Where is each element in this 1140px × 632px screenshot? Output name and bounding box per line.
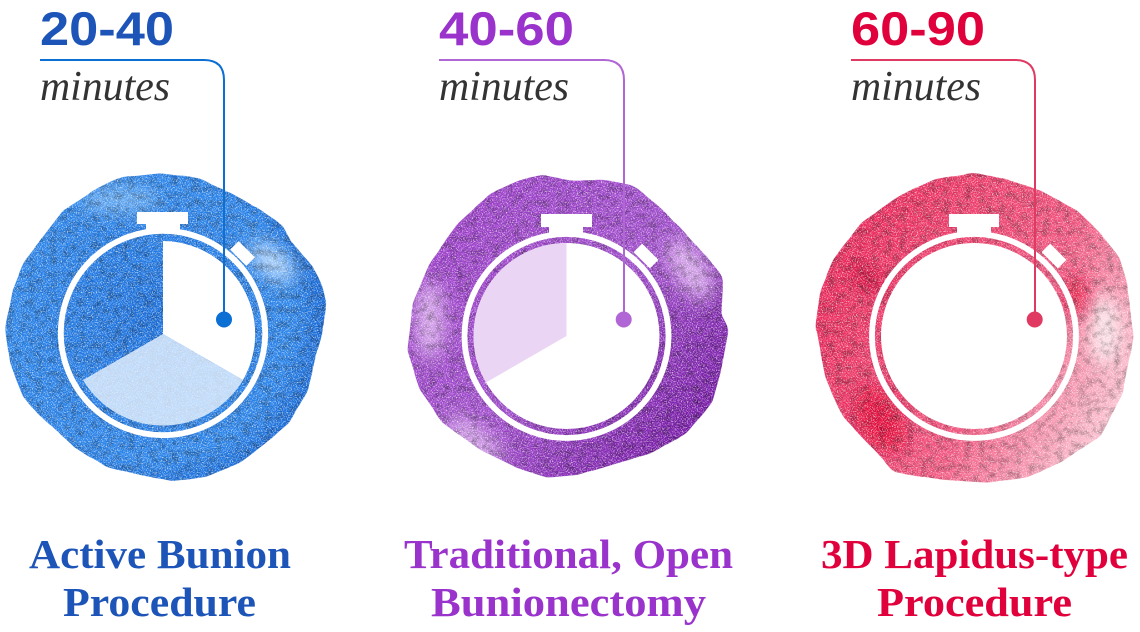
procedure name: Active Bunion xyxy=(29,531,291,577)
unit: minutes: minutes xyxy=(851,64,981,110)
watercolor blob: purple xyxy=(407,174,728,478)
time value: 40-60: 40-60 xyxy=(439,2,574,55)
panel: traditional open bunionectomy xyxy=(400,2,735,625)
time value: 60-90: 60-90 xyxy=(851,2,985,55)
procedure name: Procedure xyxy=(63,579,256,625)
stopwatch icon: purple xyxy=(464,214,668,438)
procedure name: Bunionectomy xyxy=(431,579,707,625)
unit: minutes: minutes xyxy=(40,64,170,110)
procedure name: Traditional, Open xyxy=(404,531,733,577)
panel: 3D Lapidus-type procedure xyxy=(810,2,1140,625)
stopwatch icon: red xyxy=(872,214,1076,438)
panel: active bunion procedure xyxy=(0,2,335,625)
procedure name: 3D Lapidus-type xyxy=(821,531,1128,577)
watercolor blob: blue xyxy=(0,165,335,490)
leader line with dot xyxy=(851,60,1043,328)
procedure name: Procedure xyxy=(877,579,1072,625)
watercolor blob: red xyxy=(810,165,1140,490)
leader line with dot xyxy=(439,60,632,328)
unit: minutes: minutes xyxy=(439,64,569,110)
time value: 20-40: 20-40 xyxy=(40,2,174,55)
stopwatch icon: blue xyxy=(61,212,265,435)
leader line with dot xyxy=(40,60,232,328)
